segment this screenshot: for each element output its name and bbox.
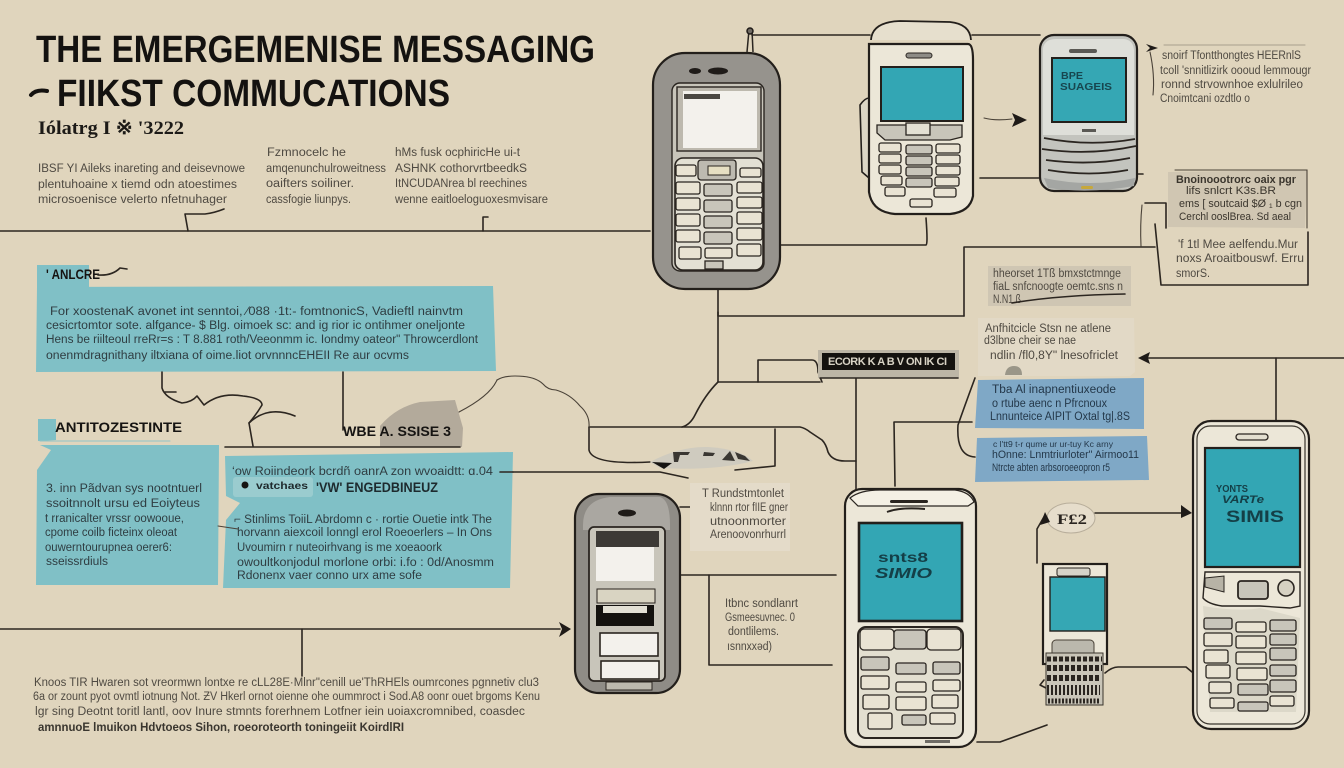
box: outlined note right: 'f 1tl Mee aelfendu.Mur: [1178, 239, 1298, 251]
phone 1: grey candybar: [653, 28, 780, 289]
label: black banner: ECORK K A B V ON lK CI: [828, 356, 948, 368]
box: pale note centre right: d3lbne cheir se nae: [984, 335, 1076, 347]
panel: blue note one: [975, 378, 1144, 429]
box: beige callout upper right: Bnoinoootrorc oaix pgr: [1176, 174, 1297, 186]
panel: teal left detail: t rranicalter vrssr oowooue,: [45, 513, 184, 525]
section heading: second tab: [38, 419, 182, 441]
panel: blue note two: c l'tt9 t-r qume ur ur-tuy Kc arny: [993, 440, 1113, 449]
panel: teal overview: onenmdragnithany iltxiana of oime.liot orvnnncEHEII Re aur ocvms: [46, 350, 409, 362]
text block: footer: amnnuoE lmuikon Hdvtoeos Sihon, roeoroteorth toningeiit KoirdlRI: [38, 722, 404, 734]
screen text: VARTe: [1222, 494, 1264, 506]
panel: teal overview: cesicrtomtor sote. alfgance- $ Blg. oimoek sc: and ig rior ic ontihmer oneljonte: [46, 320, 465, 332]
box: outlined note right: smorS.: [1176, 268, 1210, 280]
text block: intro middle: [266, 147, 386, 206]
panel: teal left detail: [36, 445, 219, 585]
box: beige callout upper right: Cerchl ooslBrea. Sd aeal: [1179, 211, 1291, 223]
panel: teal overview: [36, 286, 496, 372]
box: grey note middle right: [988, 266, 1131, 306]
text block: intro middle: oaifters soiliner.: [266, 178, 354, 190]
badge: oval price label: F£2: [1057, 512, 1087, 528]
box: grey note middle right: fiaL snfcnoogte oemtc.sns n: [993, 281, 1123, 293]
panel: blue note one: o rtube aenc n Pfrcnoux: [992, 398, 1107, 410]
box: outlined note right: noxs Aroaitbouswf. Erru: [1176, 253, 1304, 265]
screen text: [1216, 484, 1284, 526]
screen text: SIMIO: [875, 565, 932, 582]
screen text: snts8: [878, 549, 928, 565]
text block: intro left: plentuhoaine x tiemd odn atoestimes: [38, 179, 237, 191]
text block: note beside flip phone: klnnn rtor fIIE gner: [710, 502, 788, 514]
text block: top right note: [1160, 45, 1311, 105]
text block: footer: lgr sing Deotnt toritl lantl, oov Inure stmnts forerhnem Lotfner iein uoiaxcromnibed, coasdec: [35, 706, 525, 718]
icon: flat device sketch: [650, 447, 753, 469]
text block: note beside flip phone: utnoonmorter: [710, 516, 786, 528]
panel: teal left detail: ssoitnnolt ursu ed Eoiyteus: [46, 498, 200, 510]
chip: vatchaes: [256, 480, 308, 492]
text block: outlined note below flip phone: dontlilems.: [728, 626, 779, 638]
screen text: BPE: [1061, 71, 1083, 82]
text block: top right note: Cnoimtcani ozdtlo o: [1160, 93, 1250, 105]
panel: teal left detail: ouwerntourupnea oerer6:: [45, 542, 172, 554]
phone 4: dark flip phone: [575, 494, 680, 693]
text block: outlined note below flip phone: ısnnxxəd): [727, 641, 772, 653]
phone 5: large cream handset: [845, 489, 976, 747]
box: pale note centre right: ndlin /fl0,8Y" lnesofriclet: [990, 350, 1119, 362]
screen text: SIMIS: [1226, 507, 1284, 526]
section label: first tab: [37, 265, 127, 288]
phone 7: tall handset with large screen: [1193, 421, 1309, 729]
label: black banner: [818, 350, 959, 378]
panel: teal left detail: sseissrdiuls: [46, 556, 108, 568]
panel: blue note two: [975, 436, 1149, 482]
subtitle: Iólatrg I ※ '3222: [38, 118, 184, 139]
text block: intro right: ItNCUDANrea bl reechines: [395, 178, 527, 190]
panel: teal overview: Hens be riilteoul rreRr=s : T 8.881 roth/Veeonmm ic. Iondmy oateor" Throwcerdlont: [46, 334, 479, 346]
keypad: [675, 158, 763, 270]
text block: intro middle: Fzmnocelc he: [267, 147, 346, 159]
text block: note beside flip phone: T Rundstmtonlet: [702, 488, 785, 500]
panel: teal overview: For xoostenaK avonet int senntoi, ⁄088 ·1t:- fomtnonicS, Vadieftl nainvtm: [50, 306, 463, 318]
box: beige callout upper right: ems [ soutcaid $Ø ₁ b cgn: [1179, 198, 1302, 210]
text block: outlined note below flip phone: [725, 598, 799, 653]
text block: note beside flip phone: Arenoovonrhurrl: [710, 529, 786, 541]
text block: intro left: IBSF YI Aileks inareting and deisevnowe: [38, 163, 245, 175]
text block: outlined note below flip phone: Itbnc sondlanrt: [725, 598, 799, 610]
panel: blue note one: Tba Al inapnentiuxeode: [992, 384, 1116, 396]
text block: footer: 6a or zount pyot ovmtl iotnung Not. ƵV Hkerl ornot oienne ohe oummroct i Sod.A8 oonr ouet brgoms Kenu: [33, 691, 540, 703]
antenna: [747, 30, 753, 52]
text block: top right note: tcoll 'snnitlizirk oooud lemmougr: [1160, 65, 1311, 77]
box: outlined note right: [1176, 239, 1304, 280]
box: grey note middle right: N.N1 ß: [993, 294, 1021, 306]
phone 2: cream handset with teal screen: [860, 21, 973, 214]
panel: blue note one: Lnnunteice AIPIT Oxtal tg|.8S: [990, 411, 1130, 423]
text block: intro right: ASHNK cothorvrtbeedkS: [395, 163, 527, 175]
text block: intro middle: cassfogie liunpys.: [266, 194, 351, 206]
panel: teal right detail: horvann aiexcoil lonngl erol Roeoerlers – In Ons: [237, 527, 492, 539]
box: grey note middle right: hheorset 1Tß bmxstctmnge: [993, 268, 1121, 280]
title: FIIKST COMMUCATIONS: [57, 73, 450, 115]
panel: teal right detail: owoultkonjodul morlone orbi: i.fo : 0d/Anosmm: [237, 557, 494, 569]
panel: teal left detail: 3. inn Pãdvan sys nootntuerl: [46, 483, 202, 495]
text block: outlined note below flip phone: Gsmeesuvnec. 0: [725, 612, 795, 624]
badge: oval price label: [1040, 503, 1095, 533]
section label: first tab: ' ANLCRE: [46, 266, 100, 282]
keypad: [1203, 606, 1300, 712]
panel: teal right detail: ‘ow Roiindeork bcrdñ oanrA zon wvoaidtt: ɑ.04: [232, 466, 494, 478]
phone 3: silver slider: [1040, 35, 1137, 191]
curved connector from overview panel: [162, 372, 343, 446]
text block: top right note: snoirf Tfontthongtes HEERnlS: [1162, 50, 1301, 62]
section heading: second tab: ANTITOZESTINTE: [55, 419, 182, 435]
text block: note beside flip phone: [690, 483, 790, 551]
connector lines: top timeline: [0, 35, 1158, 382]
text block: intro left: microsoenisce velerto nfetnuhager: [38, 194, 227, 206]
text block: intro right: [394, 147, 548, 206]
grey blob label: [225, 400, 463, 447]
panel: teal right detail: ⌐ Stinlims ToiiL Abrdomn c · rortie Ouetie intk The: [234, 514, 492, 526]
box: pale note centre right: [978, 318, 1135, 376]
panel: teal right detail: [218, 452, 513, 588]
chip: [233, 477, 313, 497]
phone 3: silver slider: SUAGEIS: [1060, 82, 1112, 93]
text block: intro middle: amqenunchulroweitness: [266, 163, 386, 175]
text block: top right note: ronnd strvownhoe exlulrileo: [1161, 79, 1303, 91]
connector lines: centre network: [459, 205, 1344, 490]
phone 6: small phone: [1043, 564, 1107, 705]
connector lines: lower left: [0, 505, 1192, 742]
text block: intro right: wenne eaitloeloguoxesmvisare: [394, 194, 548, 206]
keypad: [858, 627, 963, 738]
panel: teal right detail: 'VW' ENGEDBINEUZ: [316, 479, 438, 495]
panel: blue note two: Ntrcte abten arbsoroeeopron r5: [992, 462, 1110, 474]
box: pale note centre right: Anfhitcicle Stsn ne atlene: [985, 323, 1111, 335]
title: THE EMERGEMENISE MESSAGING: [36, 29, 595, 71]
text block: footer: Knoos TIR Hwaren sot vreormwn lontxe re cLL28E·Mlnr"cenill ue'ThRHEls oumrcones pgnnetiv clu3: [34, 677, 539, 689]
box: beige callout upper right: lifs snlcrt K3s.BR: [1186, 185, 1276, 197]
text block: intro right: hMs fusk ocphiricHe ui-t: [395, 147, 521, 159]
panel: teal right detail: Uvoumirn r nuteoirhvang is me xoeaoork: [237, 542, 442, 554]
box: beige callout upper right: [1145, 170, 1307, 228]
text block: footer: [33, 677, 540, 734]
keyboard rows: [1047, 659, 1102, 701]
text block: intro left: [38, 163, 245, 206]
panel: teal left detail: cpome coilb ficteinx oleoat: [45, 527, 178, 539]
keypad: [877, 123, 962, 207]
grey blob label: WBE A. SSISE 3: [343, 423, 451, 439]
panel: teal right detail: Rdonenx vaer conno urx ame sofe: [237, 570, 422, 582]
screen text: [875, 549, 932, 582]
panel: blue note two: hOnne: Lnmtriurloter" Airmoo11: [992, 449, 1139, 461]
screen text: YONTS: [1216, 484, 1248, 495]
title: [31, 29, 595, 115]
